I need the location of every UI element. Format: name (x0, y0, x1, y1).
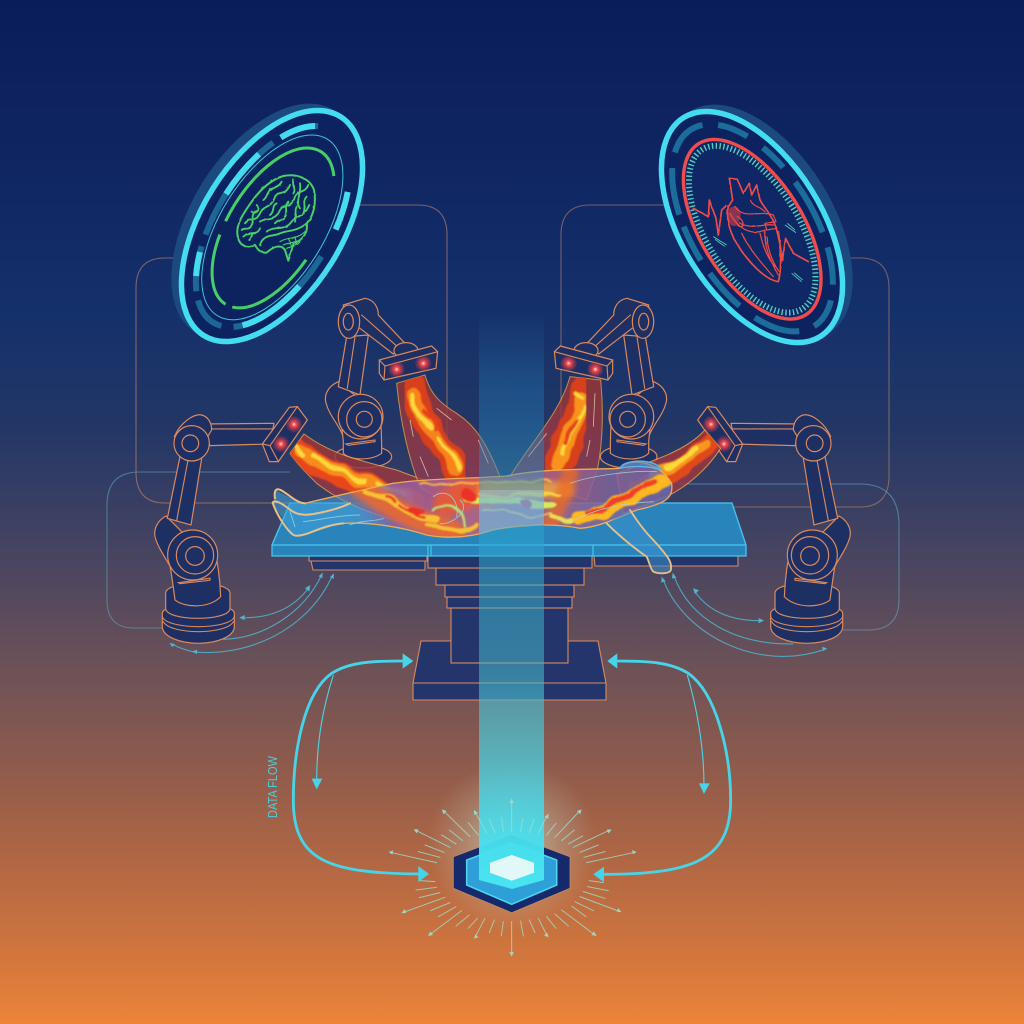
left feedback loop (293, 661, 420, 874)
table front edge (272, 503, 746, 556)
rear right robot arm (554, 298, 667, 468)
patient body: translucent thermal figure (273, 461, 672, 573)
table underside panels (309, 556, 738, 570)
display disc (133, 71, 401, 374)
thermal flames (360, 473, 665, 532)
left holographic display: brain (133, 71, 401, 374)
main data-flow arrows (293, 653, 731, 882)
hub core (490, 855, 534, 881)
rear left robot arm (325, 298, 438, 468)
pedestal (413, 555, 606, 700)
light glow (427, 760, 597, 930)
branch arrows (317, 675, 704, 785)
hanging arm (607, 510, 671, 573)
operating table (272, 503, 746, 700)
icon: brain (237, 175, 315, 261)
thin arrows near robot bases (169, 573, 827, 656)
table top (272, 503, 746, 556)
central data beam (389, 310, 637, 957)
display disc (623, 72, 891, 375)
rear-right beam flames (528, 387, 595, 480)
front right robot arm (698, 407, 850, 643)
light beams from robot heads (290, 375, 721, 530)
connector frames (107, 205, 899, 630)
vertical beam (479, 310, 544, 889)
front-right beam flames (637, 437, 713, 490)
rear-left beam flames (410, 387, 488, 477)
beam whitening over body (479, 490, 544, 535)
right feedback loop (603, 661, 731, 874)
data flow label: DATA FLOW (266, 756, 280, 818)
radiating rays (389, 798, 637, 957)
hub hexagon outer (453, 835, 570, 913)
hub hexagon middle (467, 843, 557, 904)
body outline (273, 461, 672, 573)
icon: heart with ECG (693, 178, 808, 282)
body silhouette (273, 462, 672, 537)
front left robot arm (155, 407, 307, 643)
flame patterns in left beams (295, 387, 488, 500)
front-left beam flames (295, 447, 417, 500)
right holographic display: heart (623, 72, 891, 375)
arrowheads (312, 653, 710, 882)
flame patterns in right beams (528, 387, 713, 490)
head cap (620, 461, 662, 470)
